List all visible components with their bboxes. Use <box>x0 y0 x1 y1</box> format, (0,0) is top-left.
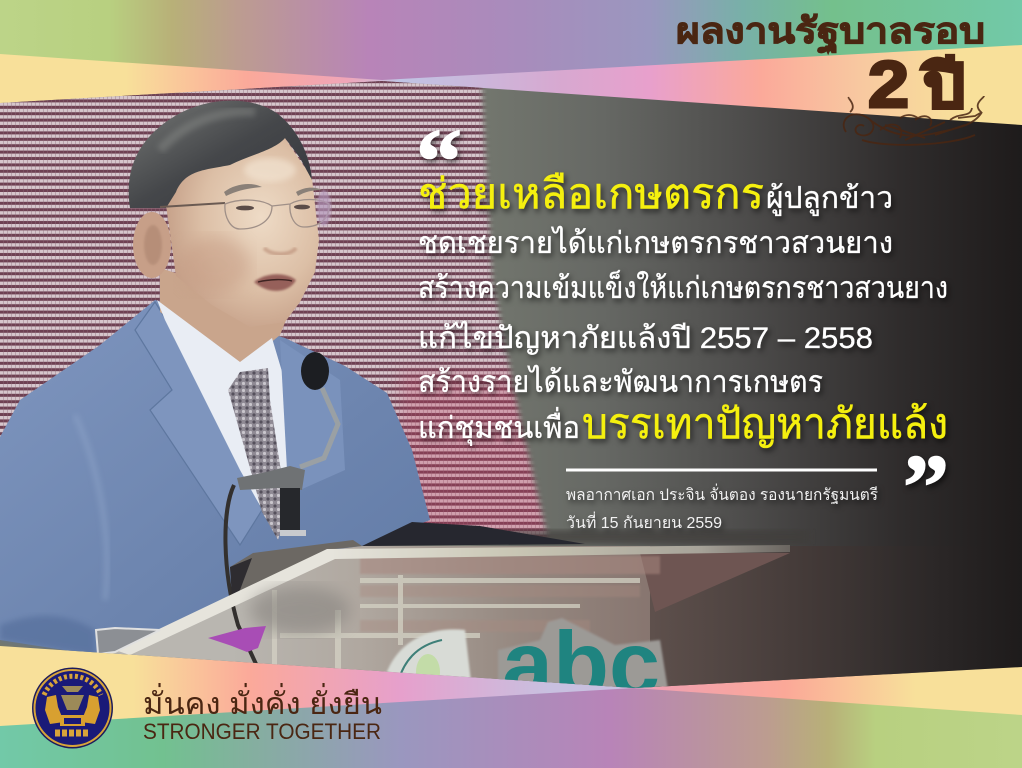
attribution <box>566 483 878 532</box>
word pi: ปี <box>920 53 965 120</box>
face <box>166 138 319 327</box>
quote line 2: ชดเชยรายได้แก่เกษตรกรชาวสวนยาง <box>418 225 893 260</box>
abc sign: abc <box>502 614 660 715</box>
bottom colour band <box>0 680 1022 768</box>
speaker name: พลอากาศเอก ประจิน จั่นตอง รองนายกรัฐมนตรี <box>566 483 878 504</box>
ornament under 2-year badge <box>844 96 984 145</box>
shirt <box>157 300 288 520</box>
podium backdrop <box>100 530 1022 696</box>
mouth <box>254 274 296 291</box>
slogan Thai: มั่นคง มั่งคั่ง ยั่งยืน <box>143 683 382 721</box>
microphone <box>225 352 338 664</box>
title: 2 years <box>868 47 965 121</box>
lapel <box>135 302 262 545</box>
title: government results: ผลงานรัฐบาลรอบ <box>676 10 985 54</box>
quote line 3: สร้างความเข้มแข็งให้แก่เกษตรกรชาวสวนยาง <box>418 269 948 305</box>
top colour band <box>0 0 1022 110</box>
quote line 1: ผู้ปลูกข้าว <box>766 182 893 216</box>
quote line 6: แก่ชุมชนเพื่อ <box>418 407 580 447</box>
LED wall background <box>0 70 560 550</box>
quote line 6 highlight: บรรเทาปัญหาภัยแล้ง <box>582 400 948 448</box>
podium <box>94 522 790 688</box>
mic cable <box>225 485 256 664</box>
eyebrows and eyes <box>224 184 322 210</box>
icon: government seal <box>32 668 113 748</box>
quote text block <box>418 170 948 448</box>
neck <box>160 270 286 362</box>
abc sign halo <box>498 618 668 695</box>
quote line 1 highlight: ช่วยเหลือเกษตรกร <box>418 170 764 217</box>
slogan English: STRONGER TOGETHER <box>143 719 381 744</box>
quote line 4: แก้ไขปัญหาภัยแล้งปี 2557 – 2558 <box>418 320 873 355</box>
date: วันที่ 15 กันยายน 2559 <box>566 511 722 532</box>
closing quotation mark: ” <box>903 436 949 538</box>
hair <box>129 101 312 208</box>
attribution rule <box>566 468 877 472</box>
nose <box>264 248 296 254</box>
top pastel band <box>0 45 1022 130</box>
purple flower <box>208 626 266 652</box>
quote line 5: สร้างรายได้และพัฒนาการเกษตร <box>418 364 823 399</box>
opening quotation mark: “ <box>416 110 462 212</box>
ear <box>133 212 171 278</box>
speaker figure <box>0 101 430 655</box>
green logo mark <box>386 628 472 678</box>
bottom pastel band <box>0 640 1022 726</box>
glasses <box>160 200 329 229</box>
tie <box>228 368 280 540</box>
suit <box>0 300 430 655</box>
number 2: 2 <box>868 47 909 121</box>
